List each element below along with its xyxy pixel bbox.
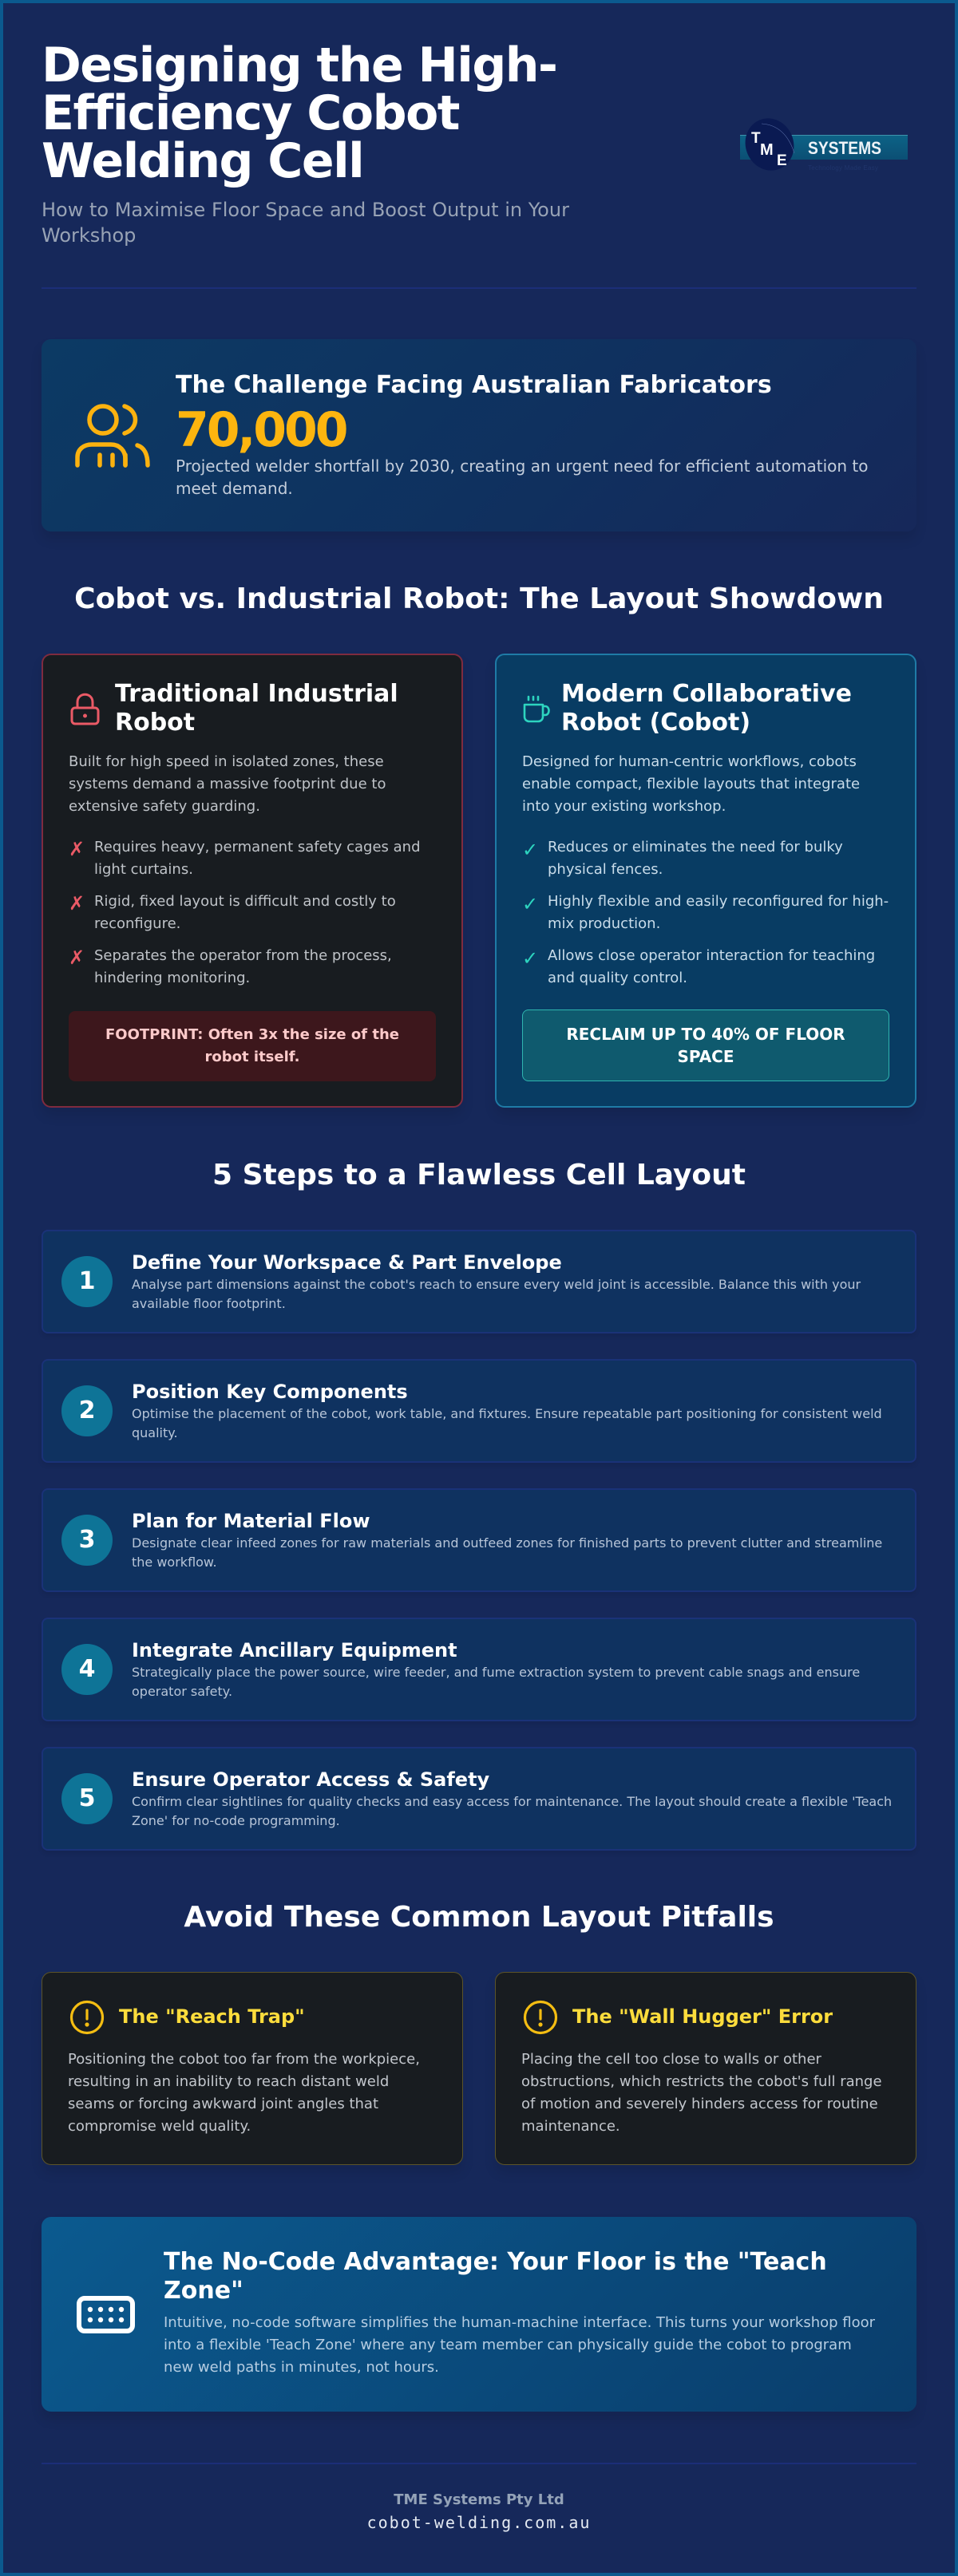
pitfall description: compromise weld quality. [68, 2118, 251, 2135]
no-code description: Intuitive, no-code software simplifies the human-machine interface. This turns your workshop floor [164, 2314, 875, 2331]
step 4 [42, 1618, 916, 1721]
list item [522, 947, 875, 986]
list item [69, 838, 421, 878]
big stat: 70,000 [176, 402, 346, 458]
icon: warning [524, 2000, 557, 2035]
step number: 5 [79, 1784, 95, 1812]
step 2 [42, 1359, 916, 1463]
company name: TME Systems Pty Ltd [394, 2491, 564, 2508]
panel: traditional industrial robot [42, 654, 463, 1108]
icon: users [75, 404, 150, 468]
list item: ✓ [522, 947, 538, 970]
pitfall: reach trap [42, 1972, 463, 2165]
logo: TME Systems: SYSTEMS [808, 138, 881, 158]
step number [61, 1256, 113, 1307]
card description: Designed for human-centric workflows, cobots [522, 753, 857, 770]
pitfall title: The "Wall Hugger" Error [572, 2005, 833, 2028]
pitfall description [68, 2051, 420, 2135]
footprint callout: robot itself. [205, 1049, 299, 1065]
floor space callout: RECLAIM UP TO 40% OF FLOOR [566, 1025, 845, 1044]
list [522, 839, 889, 986]
card heading [115, 680, 398, 737]
list item [69, 892, 396, 932]
step description [132, 1535, 882, 1570]
challenge description: Projected welder shortfall by 2030, creating an urgent need for efficient automation to [176, 456, 869, 476]
website: cobot-welding.com.au [367, 2513, 591, 2532]
pitfall description [521, 2051, 882, 2135]
list item: Allows close operator interaction for teaching [548, 947, 875, 964]
pitfall description: of motion and severely hinders access for routine [521, 2096, 878, 2112]
step description: the workflow. [132, 1555, 217, 1570]
list item: ✗ [69, 838, 85, 860]
list item [522, 839, 843, 878]
card description: systems demand a massive footprint due to [69, 776, 386, 792]
step number [61, 1644, 113, 1695]
floor space callout: SPACE [677, 1047, 734, 1066]
card heading [561, 680, 852, 737]
step description: Designate clear infeed zones for raw materials and outfeed zones for finished parts to prevent clutter and streamline [132, 1535, 882, 1551]
logo: TME Systems: Technology Made Easy [808, 164, 878, 172]
step description [132, 1277, 861, 1311]
header [42, 38, 569, 247]
step description: Analyse part dimensions against the cobot's reach to ensure every weld joint is accessible. Balance this with your [132, 1277, 861, 1292]
logo: TME Systems: M [760, 141, 774, 159]
step number: 4 [79, 1655, 95, 1683]
footer [367, 2491, 591, 2532]
list item: light curtains. [94, 861, 193, 878]
no-code heading [164, 2248, 827, 2305]
challenge description [176, 456, 869, 498]
step number [61, 1385, 113, 1436]
title: Welding Cell [42, 133, 363, 189]
no-code description: into a flexible 'Teach Zone' where any team member can physically guide the cobot to program [164, 2337, 852, 2353]
pitfall description: maintenance. [521, 2118, 620, 2135]
step description [132, 1665, 860, 1699]
title [42, 38, 556, 189]
step number: 1 [79, 1267, 95, 1295]
step title: Integrate Ancillary Equipment [132, 1639, 457, 1661]
logo: TME Systems: E [777, 152, 787, 169]
title: Designing the High- [42, 38, 556, 93]
card heading: Modern Collaborative [561, 680, 852, 708]
list item [522, 893, 889, 932]
step number [61, 1515, 113, 1566]
card description: Built for high speed in isolated zones, these [69, 753, 384, 770]
list item: reconfigure. [94, 915, 180, 932]
list item: mix production. [548, 915, 660, 932]
icon: warning [70, 2000, 104, 2035]
pitfall description: resulting in an inability to reach distant weld [68, 2073, 389, 2090]
step number: 2 [79, 1397, 95, 1424]
card description: into your existing workshop. [522, 798, 726, 815]
list item: Reduces or eliminates the need for bulky [548, 839, 843, 855]
panel: challenge [42, 339, 916, 531]
list [69, 838, 421, 986]
footprint callout: FOOTPRINT: Often 3x the size of the [105, 1026, 399, 1043]
no-code heading: The No-Code Advantage: Your Floor is the "Teach [164, 2248, 827, 2276]
step title: Define Your Workspace & Part Envelope [132, 1251, 562, 1274]
step number [61, 1773, 113, 1824]
step description: Strategically place the power source, wire feeder, and fume extraction system to prevent cable snags and ensure [132, 1665, 860, 1680]
list item: ✗ [69, 946, 85, 969]
card heading: Robot (Cobot) [561, 709, 750, 737]
step 3 [42, 1488, 916, 1592]
step description: Confirm clear sightlines for quality checks and easy access for maintenance. The layout should create a flexible 'Teach [132, 1794, 892, 1809]
heading: steps: 5 Steps to a Flawless Cell Layout [212, 1159, 746, 1191]
list item: physical fences. [548, 861, 663, 878]
list item: Rigid, fixed layout is difficult and costly to [94, 893, 396, 910]
pitfall description: Positioning the cobot too far from the workpiece, [68, 2051, 420, 2068]
subtitle: How to Maximise Floor Space and Boost Output in Your [42, 199, 569, 221]
card heading: Robot [115, 709, 195, 737]
step 1 [42, 1230, 916, 1333]
step description: Optimise the placement of the cobot, work table, and fixtures. Ensure repeatable part positioning for consistent weld [132, 1406, 882, 1421]
pitfall description: obstructions, which restricts the cobot's full range [521, 2073, 882, 2090]
step 5 [42, 1747, 916, 1851]
subtitle [42, 199, 569, 247]
pitfall description: seams or forcing awkward joint angles that [68, 2096, 378, 2112]
pitfall: wall hugger [495, 1972, 916, 2165]
list item: hindering monitoring. [94, 970, 250, 986]
step title: Position Key Components [132, 1381, 408, 1403]
step title: Ensure Operator Access & Safety [132, 1768, 489, 1791]
floor space callout [522, 1009, 889, 1081]
step description: operator safety. [132, 1684, 232, 1699]
list item: Highly flexible and easily reconfigured for high- [548, 893, 889, 910]
icon: keypad [77, 2296, 135, 2333]
card description [69, 753, 386, 815]
panel: no-code advantage [42, 2217, 916, 2412]
pitfall description: Placing the cell too close to walls or other [521, 2051, 821, 2068]
step description [132, 1406, 882, 1440]
panel: modern collaborative robot [495, 654, 916, 1108]
card description: enable compact, flexible layouts that integrate [522, 776, 860, 792]
heading: showdown: Cobot vs. Industrial Robot: The Layout Showdown [74, 583, 884, 615]
list item: ✓ [522, 893, 538, 915]
footprint callout [69, 1011, 436, 1081]
step description: quality. [132, 1425, 178, 1440]
card description: extensive safety guarding. [69, 798, 260, 815]
logo: TME Systems: T [751, 130, 761, 147]
icon: lock [70, 693, 99, 725]
no-code description: new weld paths in minutes, not hours. [164, 2359, 439, 2376]
step title: Plan for Material Flow [132, 1510, 370, 1532]
list item [69, 946, 392, 986]
heading: pitfalls: Avoid These Common Layout Pitfalls [184, 1901, 774, 1934]
list item: and quality control. [548, 970, 687, 986]
list item: Requires heavy, permanent safety cages and [94, 839, 421, 855]
list item: ✓ [522, 839, 538, 861]
icon: coffee cup [524, 696, 550, 723]
step description [132, 1794, 892, 1828]
pitfall title: The "Reach Trap" [119, 2005, 305, 2028]
step number: 3 [79, 1526, 95, 1554]
challenge heading: The Challenge Facing Australian Fabricators [176, 371, 772, 399]
title: Efficiency Cobot [42, 85, 459, 141]
step description: available floor footprint. [132, 1296, 286, 1311]
no-code description [164, 2314, 875, 2376]
list item: ✗ [69, 892, 85, 915]
logo: TME Systems [740, 118, 908, 172]
card description [522, 753, 860, 815]
card heading: Traditional Industrial [115, 680, 398, 708]
challenge description: meet demand. [176, 479, 293, 498]
no-code heading: Zone" [164, 2277, 243, 2305]
list item: Separates the operator from the process, [94, 947, 392, 964]
step description: Zone' for no-code programming. [132, 1813, 340, 1828]
subtitle: Workshop [42, 224, 136, 247]
